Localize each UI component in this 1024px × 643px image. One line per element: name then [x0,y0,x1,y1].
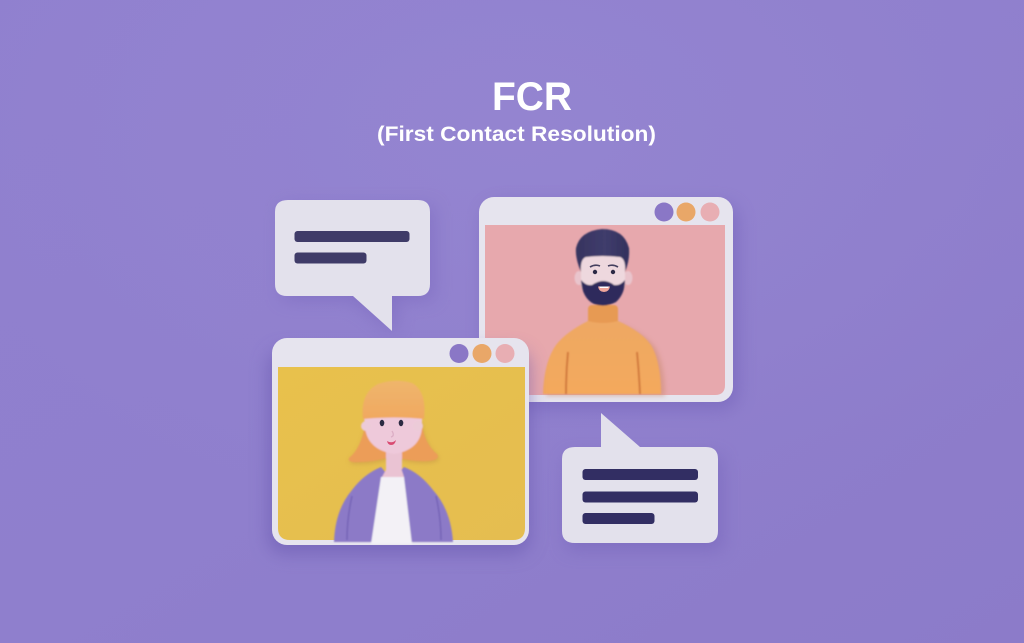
hair back [349,420,438,462]
woman avatar [334,381,453,544]
message lines [294,231,410,264]
eyes [380,420,384,426]
face [364,415,422,454]
bangs [363,381,424,419]
speech bubble: top left [275,200,434,334]
neck [386,450,402,480]
mouth [387,440,396,445]
nose [391,431,393,437]
video window: woman [268,338,530,554]
jacket [334,467,453,542]
white shirt [371,477,412,544]
window dots [654,202,720,222]
man avatar [543,229,665,396]
yellow video panel [278,367,525,540]
eyes and brows [593,270,597,274]
subtitle: (First Contact Resolution) [377,122,656,146]
title [377,75,656,146]
speech bubble: bottom right [562,413,722,550]
pink video panel [485,225,725,395]
window dots [450,344,514,363]
title: FCR [492,75,572,119]
video window: man [479,197,738,409]
message lines [582,469,698,524]
mouth [598,286,610,292]
